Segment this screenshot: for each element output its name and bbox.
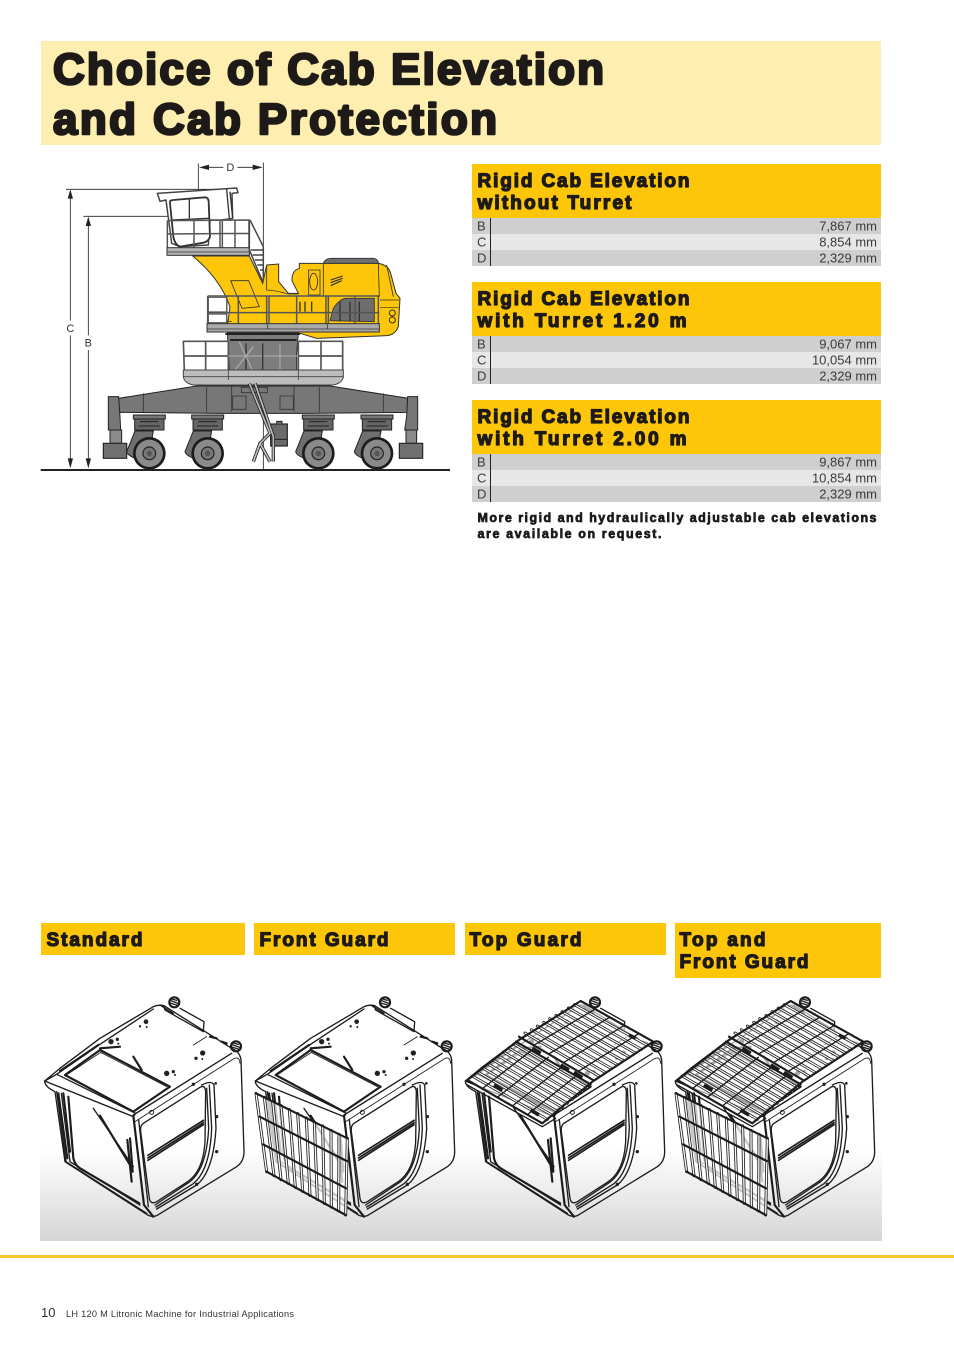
chassis <box>103 385 423 458</box>
footer: 10 <box>41 1305 55 1320</box>
yellow upperstructure <box>193 256 400 338</box>
title: and Cab Protection <box>53 95 497 144</box>
wheel sets <box>127 415 393 470</box>
heading: front guard <box>254 923 455 955</box>
panel: cab gradient background <box>40 1148 882 1241</box>
footer rule <box>0 1255 954 1258</box>
panel: rigid cab elevation with turret 1.20 m <box>472 282 881 384</box>
note on cab elevations: More rigid and hydraulically adjustable cab elevations <box>478 511 877 525</box>
panel: rigid cab elevation with turret 2.00 m: with Turret 2.00 m <box>476 429 686 450</box>
panel: rigid cab elevation without turret: Rigid Cab Elevation <box>478 171 690 192</box>
panel: rigid cab elevation without turret: 7,867 mm <box>819 218 877 234</box>
heading: top guard: Top Guard <box>470 930 582 951</box>
panel: rigid cab elevation with turret 2.00 m: C <box>477 470 486 486</box>
icon: cab with front guard <box>255 997 455 1217</box>
panel: rigid cab elevation without turret <box>472 164 881 266</box>
machine side-view diagram with dimensions <box>41 162 450 470</box>
panel: rigid cab elevation with turret 1.20 m: D <box>477 368 486 384</box>
cab with railing and stairs <box>157 188 264 282</box>
note on cab elevations <box>478 511 877 541</box>
panel: rigid cab elevation without turret: without Turret <box>476 193 632 214</box>
title <box>53 45 604 144</box>
icon: standard cab <box>45 997 244 1217</box>
panel: rigid cab elevation with turret 2.00 m: Rigid Cab Elevation <box>478 407 690 428</box>
icon: cab with top guard <box>465 997 665 1217</box>
upper deck railing <box>207 296 379 332</box>
panel: rigid cab elevation with turret 2.00 m: 2,329 mm <box>819 486 877 502</box>
heading: top and front guard <box>675 923 881 978</box>
heading: standard: Standard <box>46 930 142 951</box>
dimension lines B, C, D: B <box>85 337 92 349</box>
dimension lines B, C, D: C <box>66 323 74 335</box>
panel: rigid cab elevation without turret: D <box>477 250 486 266</box>
panel: rigid cab elevation with turret 2.00 m <box>472 400 881 502</box>
panel: rigid cab elevation without turret: 8,854 mm <box>819 234 877 250</box>
panel: rigid cab elevation with turret 1.20 m: 10,054 mm <box>812 352 877 368</box>
footer: LH 120 M Litronic Machine for Industrial Applications <box>66 1309 294 1319</box>
panel: rigid cab elevation without turret: 2,329 mm <box>819 250 877 266</box>
panel: rigid cab elevation with turret 1.20 m: 2,329 mm <box>819 368 877 384</box>
panel: rigid cab elevation with turret 1.20 m: B <box>477 336 486 352</box>
panel: rigid cab elevation with turret 1.20 m: 9,067 mm <box>819 336 877 352</box>
panel: rigid cab elevation without turret: C <box>477 234 486 250</box>
heading: top and front guard: Front Guard <box>680 952 808 973</box>
cab illustrations <box>45 997 875 1217</box>
panel: rigid cab elevation with turret 2.00 m: B <box>477 454 486 470</box>
heading: standard <box>41 923 245 955</box>
panel: rigid cab elevation with turret 1.20 m: with Turret 1.20 m <box>476 311 686 332</box>
note on cab elevations: are available on request. <box>478 527 662 541</box>
title: Choice of Cab Elevation <box>53 45 604 94</box>
turret and lower platform <box>183 333 343 385</box>
dimension lines B, C, D: D <box>226 162 234 174</box>
dimension lines B, C, D <box>66 162 263 469</box>
heading: front guard: Front Guard <box>260 930 388 951</box>
panel: rigid cab elevation with turret 2.00 m: D <box>477 486 486 502</box>
panel: rigid cab elevation with turret 1.20 m: Rigid Cab Elevation <box>478 289 690 310</box>
footer <box>41 1305 294 1320</box>
panel: rigid cab elevation with turret 1.20 m: C <box>477 352 486 368</box>
ground line <box>41 467 450 473</box>
panel: rigid cab elevation without turret: B <box>477 218 486 234</box>
panel: rigid cab elevation with turret 2.00 m: 9,867 mm <box>819 454 877 470</box>
panel: rigid cab elevation with turret 2.00 m: 10,854 mm <box>812 470 877 486</box>
title band <box>41 41 881 145</box>
icon: cab with top and front guard <box>675 997 875 1217</box>
ladder and battery box <box>249 383 287 462</box>
heading: top and front guard: Top and <box>680 930 766 951</box>
heading: top guard <box>465 923 666 955</box>
